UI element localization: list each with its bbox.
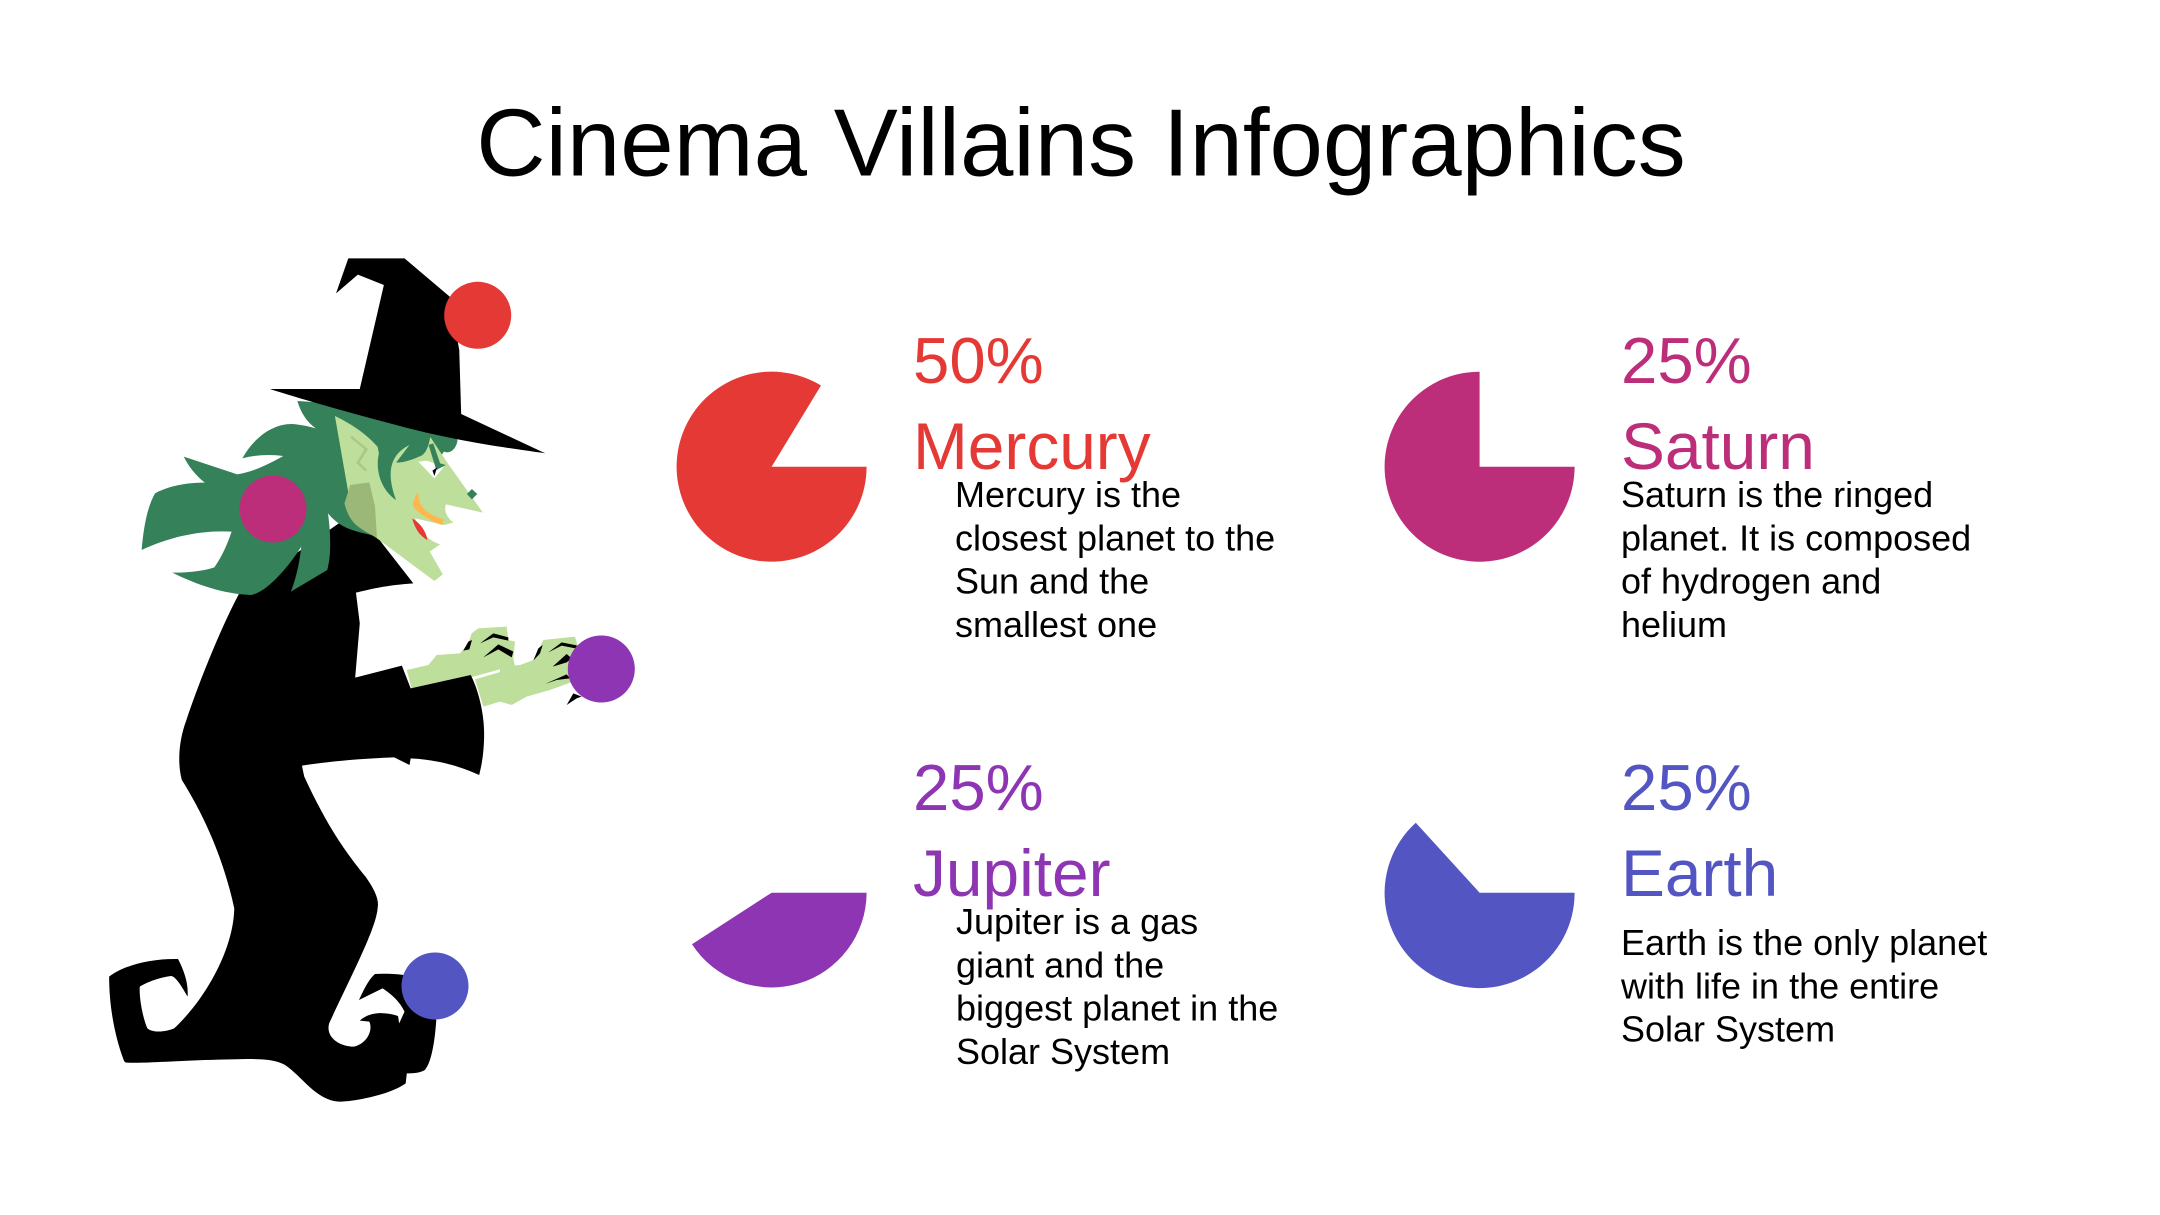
percentage: Earth: 25%	[1621, 751, 1752, 824]
text: Jupiter description: Solar System	[956, 1031, 1170, 1072]
illustration: witch	[109, 258, 635, 1102]
text: Mercury description: closest planet to the	[955, 517, 1275, 558]
text: Saturn description: helium	[1621, 604, 1727, 645]
heading: Saturn: Saturn	[1621, 409, 1815, 483]
percentage: Jupiter: 25%	[913, 751, 1044, 824]
panel: Mercury	[677, 324, 1275, 645]
marker: purple dot	[568, 636, 635, 702]
pie chart: Saturn	[1385, 372, 1575, 562]
text: Saturn description: of hydrogen and	[1621, 561, 1881, 602]
marker: blue dot	[402, 952, 468, 1020]
text: Earth description: with life in the entire	[1620, 965, 1939, 1006]
heading: Jupiter: Jupiter	[913, 836, 1110, 910]
panel: Jupiter	[692, 751, 1278, 1072]
witch mouth	[412, 518, 427, 540]
title: Cinema Villains Infographics	[476, 90, 1686, 196]
witch front hair	[377, 435, 431, 500]
pie chart: Jupiter	[692, 893, 867, 987]
panel: Earth	[1385, 751, 1987, 1050]
text: Saturn description: planet. It is composed	[1621, 517, 1971, 558]
text: Jupiter description: giant and the	[956, 944, 1164, 985]
text: Earth description: Earth is the only planet	[1621, 922, 1987, 963]
text: Mercury description: smallest one	[955, 604, 1157, 645]
text: Saturn description: Saturn is the ringed	[1621, 474, 1933, 515]
pie chart: Earth	[1385, 823, 1575, 988]
heading: Mercury: Mercury	[913, 409, 1151, 483]
marker: red dot	[444, 282, 511, 349]
text: Jupiter description: Jupiter is a gas	[956, 901, 1198, 942]
percentage: Mercury: 50%	[913, 324, 1044, 397]
panel: Saturn	[1385, 324, 1971, 645]
witch eye	[418, 443, 446, 478]
text: Jupiter description: biggest planet in the	[956, 988, 1278, 1029]
witch neck shadow	[344, 482, 377, 538]
witch nose wart	[467, 489, 477, 499]
witch hair	[142, 401, 457, 595]
heading: Earth: Earth	[1621, 836, 1778, 910]
text: Mercury description: Sun and the	[955, 561, 1149, 602]
witch hat	[270, 258, 545, 453]
witch tooth	[413, 492, 444, 525]
marker: magenta dot	[240, 476, 306, 542]
percentage: Saturn: 25%	[1621, 324, 1752, 397]
pie chart: Mercury	[677, 372, 867, 562]
text: Earth description: Solar System	[1621, 1009, 1835, 1050]
text: Mercury description: Mercury is the	[955, 474, 1181, 515]
witch face	[335, 416, 483, 581]
witch ear detail	[351, 437, 366, 471]
